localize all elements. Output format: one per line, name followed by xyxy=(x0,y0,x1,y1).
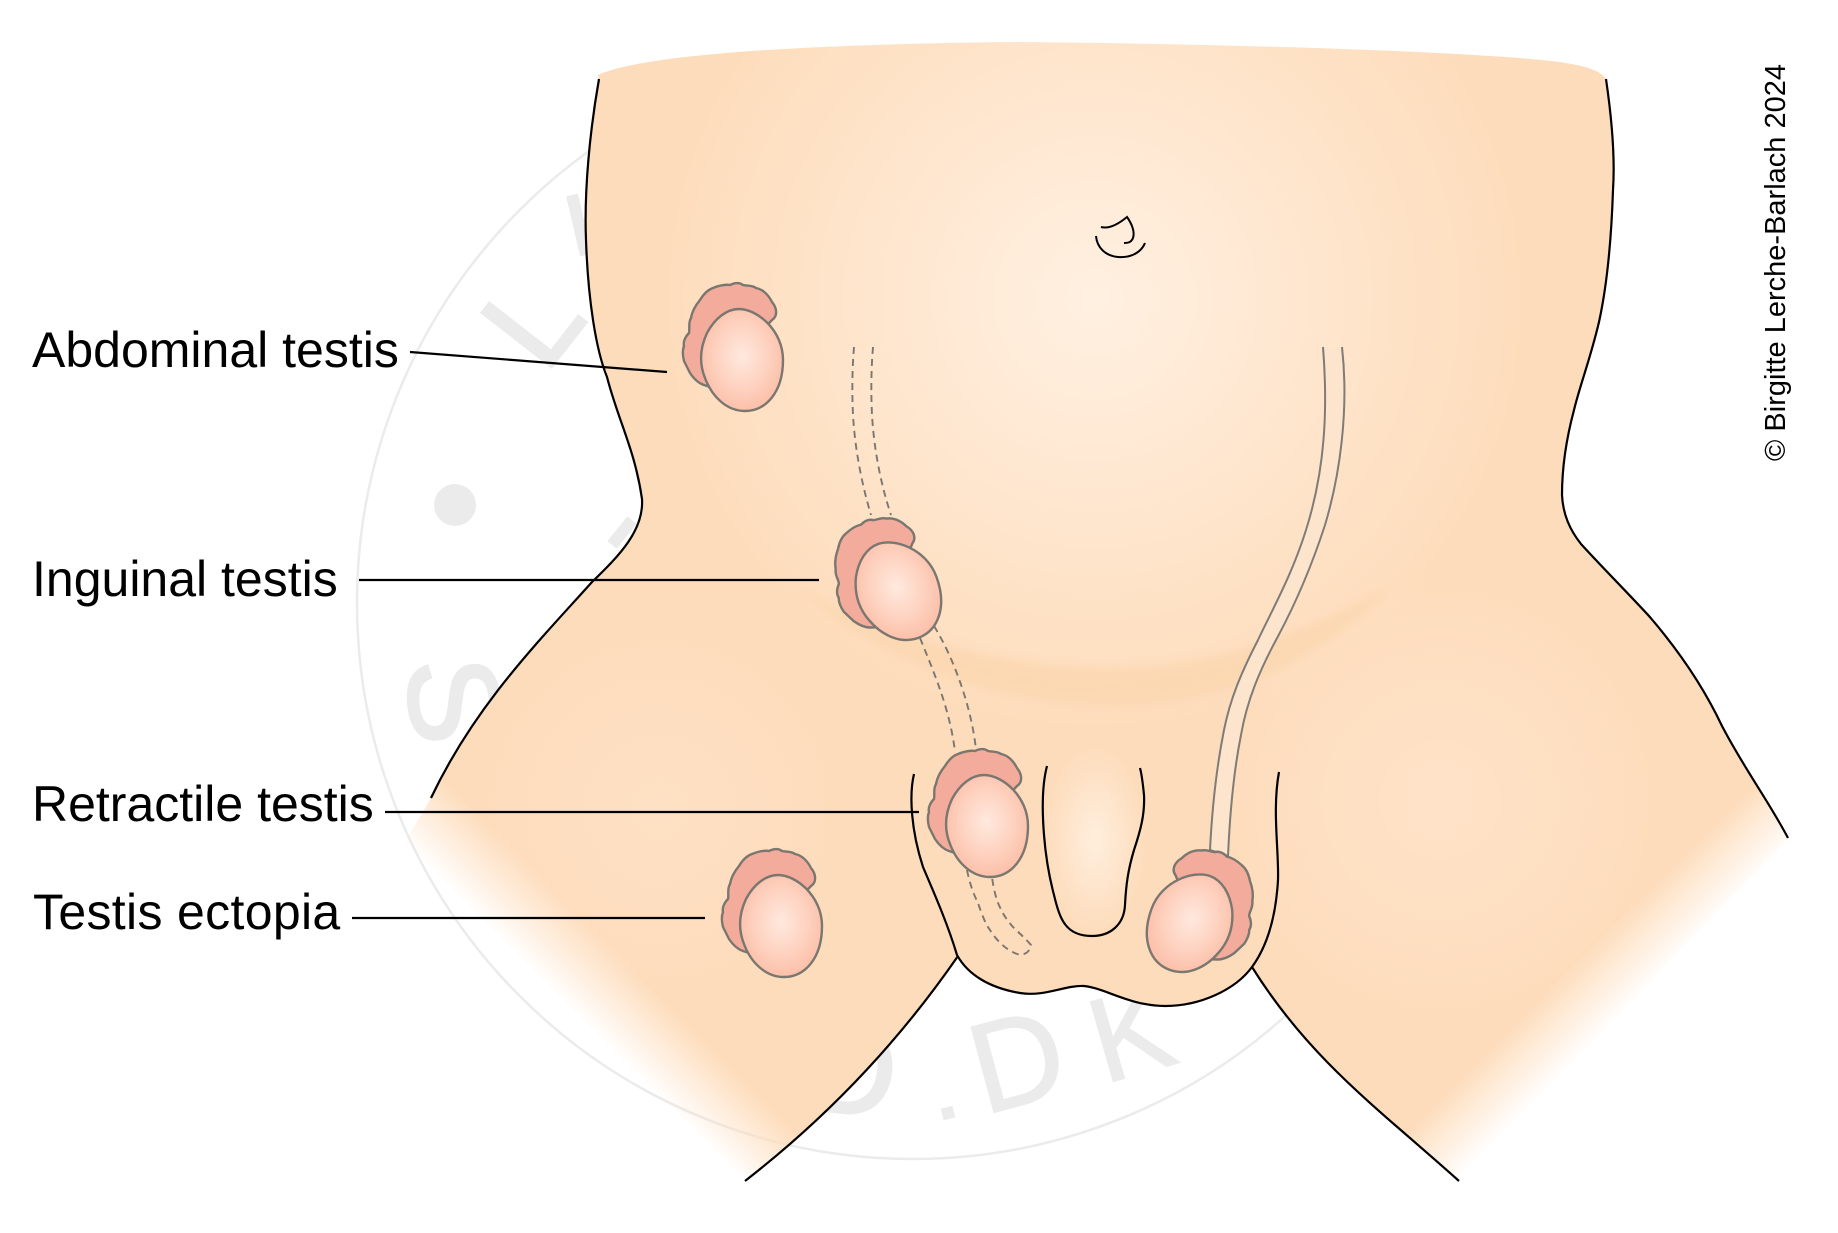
scrotum outline xyxy=(911,772,1279,1006)
leader line: retractile xyxy=(385,811,919,813)
watermark: circular stamp: K xyxy=(1074,958,1188,1109)
watermark: circular stamp: D xyxy=(797,994,904,1146)
testis: retractile xyxy=(928,749,1028,877)
copyright credit: © Birgitte Lerche-Barlach 2024 xyxy=(1760,64,1792,461)
label: inguinal testis: Inguinal testis xyxy=(32,551,338,607)
body outline: left inner thigh xyxy=(745,956,958,1181)
watermark: circular stamp xyxy=(357,47,1469,1159)
body skin fill xyxy=(410,42,1787,1176)
watermark: circular stamp: D xyxy=(954,980,1081,1142)
testis: inguinal xyxy=(816,505,954,659)
navel xyxy=(1096,217,1145,257)
label: testis ectopia: Testis ectopia xyxy=(33,884,341,940)
leader line: ectopia xyxy=(352,917,705,919)
testis: abdominal xyxy=(683,283,783,411)
leader line: inguinal xyxy=(359,579,819,581)
penis outline xyxy=(1043,766,1144,936)
testis: ectopic xyxy=(722,849,822,977)
watermark: circular stamp: S xyxy=(378,651,529,750)
right spermatic cord xyxy=(1210,347,1344,856)
body outline: right flank xyxy=(1562,79,1788,838)
leader line: abdominal xyxy=(410,352,667,372)
left dashed cord: upper segment xyxy=(852,347,891,515)
watermark: circular stamp: L xyxy=(454,248,611,392)
label: abdominal testis: Abdominal testis xyxy=(32,322,399,378)
testis: normal descended xyxy=(1134,837,1272,991)
body outline: left flank xyxy=(431,79,642,798)
body outline: right inner thigh xyxy=(1252,967,1459,1181)
left dashed cord: middle segment xyxy=(920,626,976,752)
label: retractile testis: Retractile testis xyxy=(32,776,374,832)
left dashed cord: lower segment xyxy=(967,870,1031,955)
